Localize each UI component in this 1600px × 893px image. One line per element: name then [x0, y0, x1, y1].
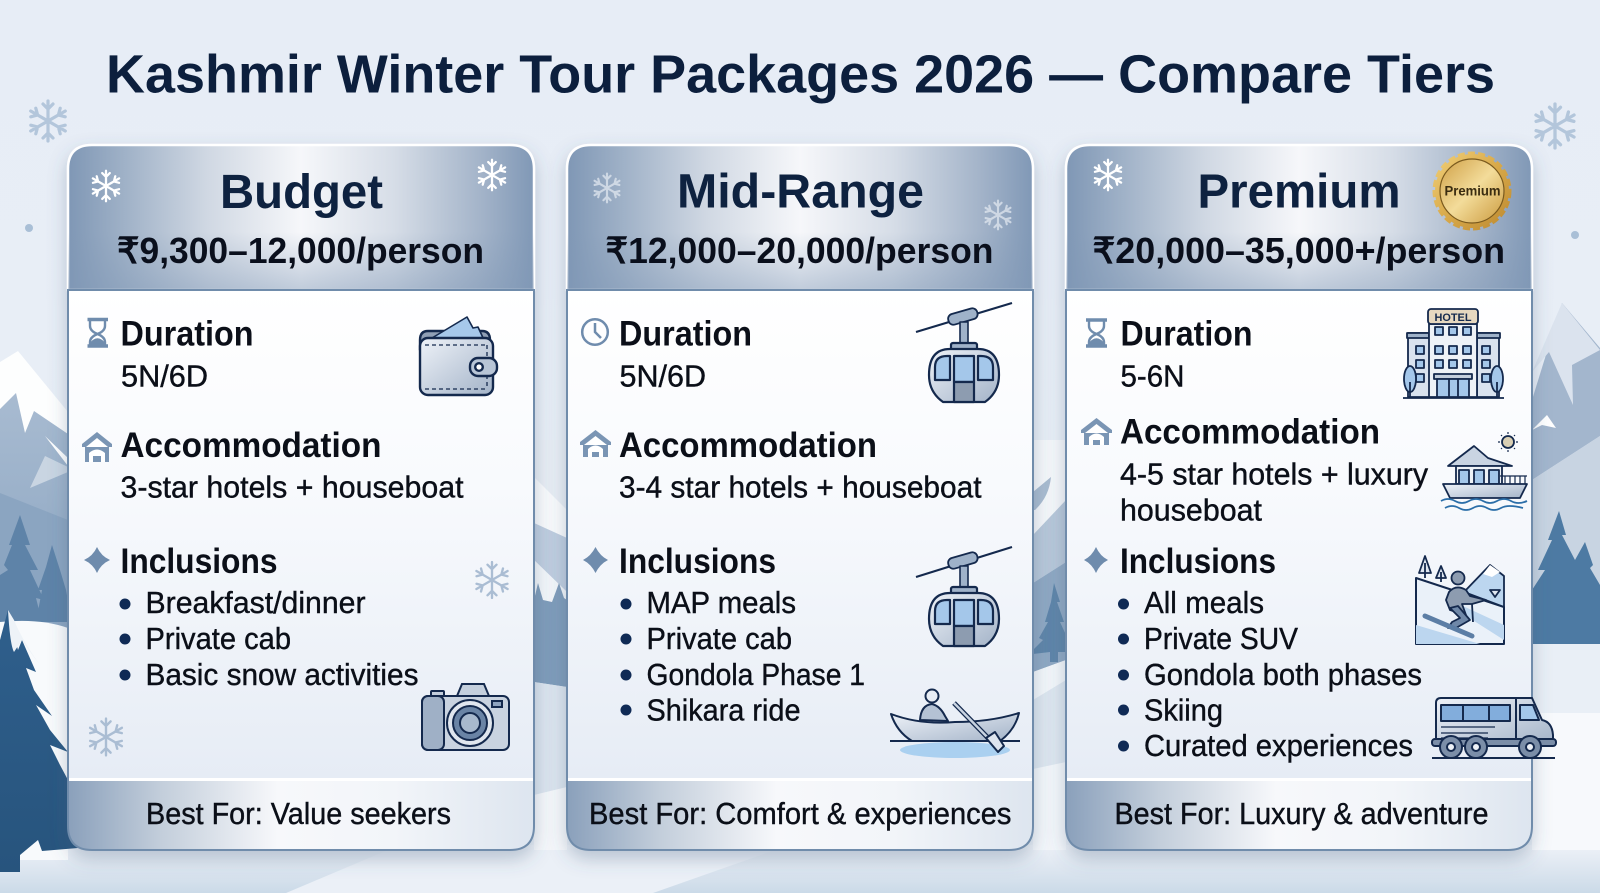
icon: building [1081, 418, 1112, 445]
duration block [619, 314, 752, 394]
accommodation block: 3-4 star hotels + houseboat [619, 470, 982, 505]
icon: skier [1416, 556, 1504, 644]
icon: inclusions diamond [1084, 547, 1108, 573]
badge: premium seal: Premium [1444, 184, 1500, 198]
duration block: 5N/6D [121, 358, 208, 394]
icon: hotel: HOTEL [1434, 312, 1472, 324]
card background [567, 145, 1033, 850]
icon: snowflake right [476, 562, 508, 598]
icon: building [82, 432, 112, 462]
left mountains and trees [0, 351, 68, 470]
icon: building [580, 430, 611, 457]
inclusions list: Shikara ride [646, 692, 800, 728]
accommodation block [120, 426, 464, 505]
icon: hourglass [1086, 320, 1107, 346]
card heading: Premium: Premium [1198, 166, 1400, 218]
accommodation block [1120, 412, 1428, 528]
icon: clock [582, 319, 608, 345]
icon: houseboat [1441, 432, 1527, 510]
duration block: 5N/6D [620, 358, 706, 394]
icon: header snowflake [1095, 160, 1121, 190]
panel: mid-range tier [567, 145, 1033, 850]
duration block: 5-6N [1120, 358, 1184, 394]
inclusions list: Private cab [146, 621, 291, 656]
icon: camera [422, 684, 509, 750]
footer: best for: Best For: Comfort & experiences [589, 796, 1012, 831]
icon: wallet [420, 317, 497, 395]
panel: budget tier [68, 145, 534, 850]
accommodation block: 4-5 star hotels + luxury [1120, 456, 1428, 492]
inclusions list: Breakfast/dinner [146, 585, 366, 620]
inclusions list: Inclusions [120, 542, 278, 581]
inclusions list: All meals [1144, 585, 1264, 620]
icon: snowflake lower left [90, 719, 122, 755]
inclusions list: Inclusions [619, 542, 776, 581]
price: ₹20,000–35,000+/person [1092, 230, 1505, 271]
accommodation block: Accommodation [619, 426, 877, 465]
card heading: Mid-Range: Mid-Range [677, 166, 924, 218]
icon: header snowflake left [93, 171, 119, 201]
duration block: Duration [1120, 314, 1252, 354]
inclusions list [619, 542, 865, 728]
icon: gondola lower [916, 547, 1012, 646]
inclusions list [120, 542, 418, 692]
inclusions list: MAP meals [646, 585, 796, 620]
footer: best for: Best For: Luxury & adventure [1114, 796, 1488, 831]
inclusions list: Gondola Phase 1 [646, 657, 865, 692]
icon: header snowflake right [986, 201, 1010, 229]
inclusions list: Inclusions [1120, 542, 1276, 581]
accommodation block [619, 426, 982, 505]
duration block [120, 314, 254, 394]
footer: best for: Best For: Value seekers [146, 796, 451, 831]
accommodation block: 3-star hotels + houseboat [120, 470, 464, 505]
decorative flakes outside the cards [31, 101, 65, 141]
icon: inclusions diamond [583, 547, 608, 573]
price: ₹12,000–20,000/person [606, 230, 994, 271]
accommodation block: Accommodation [1120, 412, 1380, 452]
accommodation block: Accommodation [120, 426, 382, 465]
inclusions list: Skiing [1144, 692, 1223, 728]
lower ground [0, 845, 1600, 893]
icon: suv van [1432, 698, 1556, 758]
inclusions list: Private SUV [1144, 621, 1298, 656]
accommodation block: houseboat [1120, 492, 1262, 528]
icon: gondola [916, 303, 1012, 402]
duration block: Duration [619, 314, 752, 354]
badge: premium seal [1435, 154, 1509, 228]
right mountain and trees [1532, 303, 1600, 480]
title: Kashmir Winter Tour Packages 2026 — Compare Tiers [106, 44, 1495, 104]
icon: inclusions diamond [84, 547, 110, 573]
duration block: Duration [120, 314, 254, 354]
price: ₹9,300–12,000/person [117, 230, 484, 271]
card heading: Budget: Budget [220, 166, 383, 219]
card background [68, 145, 534, 850]
inclusions list: Private cab [646, 621, 792, 656]
inclusions list: Curated experiences [1144, 728, 1413, 763]
panel: premium tier [1066, 145, 1556, 850]
icon: hourglass [88, 320, 108, 346]
duration block [1120, 314, 1252, 394]
icon: header snowflake right [479, 160, 505, 190]
icon: hotel [1403, 309, 1504, 398]
icon: shikara boat [890, 690, 1020, 758]
inclusions list [1118, 542, 1422, 763]
card background [1066, 145, 1532, 850]
inclusions list: Basic snow activities [146, 657, 418, 692]
inclusions list: Gondola both phases [1144, 657, 1422, 692]
icon: header snowflake left [595, 174, 619, 202]
